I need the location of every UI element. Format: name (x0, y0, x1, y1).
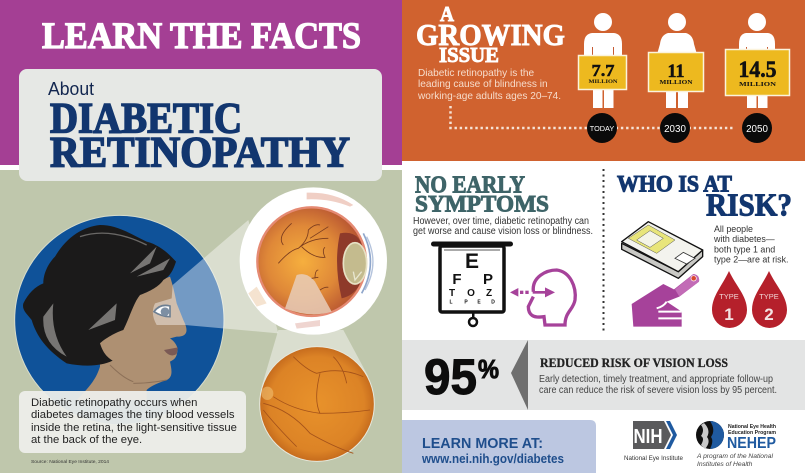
text block: description: inside the retina, the light-sensitive tissue (31, 422, 237, 434)
heading: no early symptoms: NO EARLY (415, 172, 525, 198)
person: 2050: MILLION (739, 81, 776, 88)
icon: eye chart: O (467, 288, 475, 299)
person: today: 7.7 (592, 61, 615, 80)
light beam to fundus (262, 330, 368, 387)
source note: Source: National Eye Institute, 2014 (31, 459, 109, 465)
subtitle: About (48, 79, 94, 99)
heading: growing issue: ISSUE (439, 43, 499, 67)
heading: who is at risk (617, 172, 792, 222)
text block: description: at the back of the eye. (31, 434, 142, 446)
heading: growing issue (416, 2, 565, 67)
icon: type 1 blood drop: TYPE (719, 292, 739, 301)
text block: risk: with diabetes— (713, 234, 775, 244)
text block: reduced risk: Early detection, timely treatment, and appropriate follow-up (539, 374, 773, 385)
heading: growing issue: GROWING (416, 17, 565, 52)
logo: NEHEP: Institutes of Health (697, 461, 753, 468)
illustration: woman profile (15, 215, 224, 425)
icon: eye chart (431, 242, 513, 326)
text block: symptoms: However, over time, diabetic retinopathy can (413, 216, 589, 227)
text block: risk: both type 1 and (714, 244, 775, 254)
text block: description: diabetes damages the tiny blood vessels (31, 409, 235, 421)
person: 2030 (648, 13, 704, 108)
icon: type 2 blood drop: 2 (764, 305, 774, 324)
heading: reduced risk: REDUCED RISK OF VISION LOSS (540, 355, 728, 370)
icon: eye chart: L (449, 300, 453, 306)
timeline marker: 2030: 2030 (664, 124, 686, 135)
icon: eye chart: P (483, 271, 493, 288)
icon: hand with finger prick (632, 274, 699, 327)
timeline marker: 2050 (742, 113, 772, 143)
timeline marker: today (587, 113, 617, 143)
panel: a growing issue (402, 0, 805, 161)
person: today (578, 13, 626, 108)
icon: eye chart: E (465, 250, 479, 273)
logo: NEHEP (696, 421, 776, 468)
person: 2050 (726, 13, 790, 108)
timeline dotted line (450, 106, 735, 128)
heading: no early symptoms (415, 172, 549, 218)
icon: type 2 blood drop (752, 271, 787, 328)
url: www.nei.nih.gov/diabetes (421, 451, 564, 466)
logo: NEHEP: National Eye Health (728, 424, 776, 430)
text block: reduced risk: care can reduce the risk of severe vision loss by 95 percent. (539, 385, 777, 396)
heading: retinopathy: RETINOPATHY (50, 130, 350, 176)
icon: eye chart: T (449, 288, 455, 299)
text block: risk: All people (714, 224, 753, 234)
icon: type 1 blood drop (712, 271, 747, 328)
icon: eye chart: E (477, 300, 481, 306)
logo: NEHEP: Education Program (728, 430, 776, 436)
text block: growing issue: working-age adults ages 20–74. (417, 91, 561, 102)
logo: NIH: National Eye Institute (624, 455, 683, 462)
photo: retina fundus (260, 347, 374, 461)
person: today: MILLION (588, 79, 618, 85)
timeline marker: 2050: 2050 (746, 124, 768, 135)
person: 2050: 14.5 (738, 57, 776, 82)
panel: left illustration background (0, 170, 402, 473)
icon: head with sight arrow (510, 270, 575, 325)
logo: NEHEP: NEHEP (727, 435, 776, 452)
icon: eye chart: Z (486, 288, 492, 299)
logo: NEHEP: A program of the National (696, 453, 773, 460)
heading: diabetic: DIABETIC (50, 96, 242, 142)
panel: no early symptoms (413, 172, 593, 326)
statistic: 95 (424, 349, 477, 405)
text block: risk: type 2—are at risk. (714, 254, 788, 264)
text block: growing issue: leading cause of blindness in (418, 79, 548, 90)
timeline marker: 2030 (660, 113, 690, 143)
text block: growing issue: Diabetic retinopathy is the (418, 68, 535, 79)
text block: description: Diabetic retinopathy occurs when (31, 397, 197, 409)
icon: eye chart: F (452, 271, 462, 288)
call to action: LEARN MORE AT: (422, 435, 543, 452)
panel: 95 percent (402, 340, 805, 410)
divider (602, 169, 604, 334)
text block: symptoms: get worse and cause vision loss or blindness. (413, 226, 593, 237)
person: 2030: 11 (668, 61, 684, 82)
heading: who is at risk: WHO IS AT (617, 172, 732, 196)
icon: type 2 blood drop: TYPE (759, 292, 779, 301)
statistic: % (478, 354, 499, 384)
icon: eye chart: P (464, 300, 468, 306)
icon: woman's eye (154, 305, 170, 317)
heading: who is at risk: RISK? (706, 186, 792, 222)
panel: learn more (402, 420, 596, 473)
timeline marker: today: TODAY (590, 124, 614, 133)
text block: description (19, 391, 246, 453)
arrow (511, 340, 528, 410)
panel: left header (0, 0, 402, 165)
icon: eye chart: D (491, 300, 495, 306)
heading: no early symptoms: SYMPTOMS (415, 192, 549, 218)
logo: NIH: NIH (634, 426, 662, 448)
panel: title card (19, 69, 382, 181)
heading: growing issue: A (440, 2, 455, 26)
logo: NIH (624, 421, 683, 462)
icon: glucose meter (622, 222, 703, 278)
panel: who is at risk (617, 172, 792, 328)
light beam from eye (153, 220, 278, 333)
title: LEARN THE FACTS (42, 16, 361, 57)
icon: type 1 blood drop: 1 (724, 305, 734, 324)
illustration: eye cross-section (240, 187, 387, 335)
person: 2030: MILLION (660, 80, 693, 86)
